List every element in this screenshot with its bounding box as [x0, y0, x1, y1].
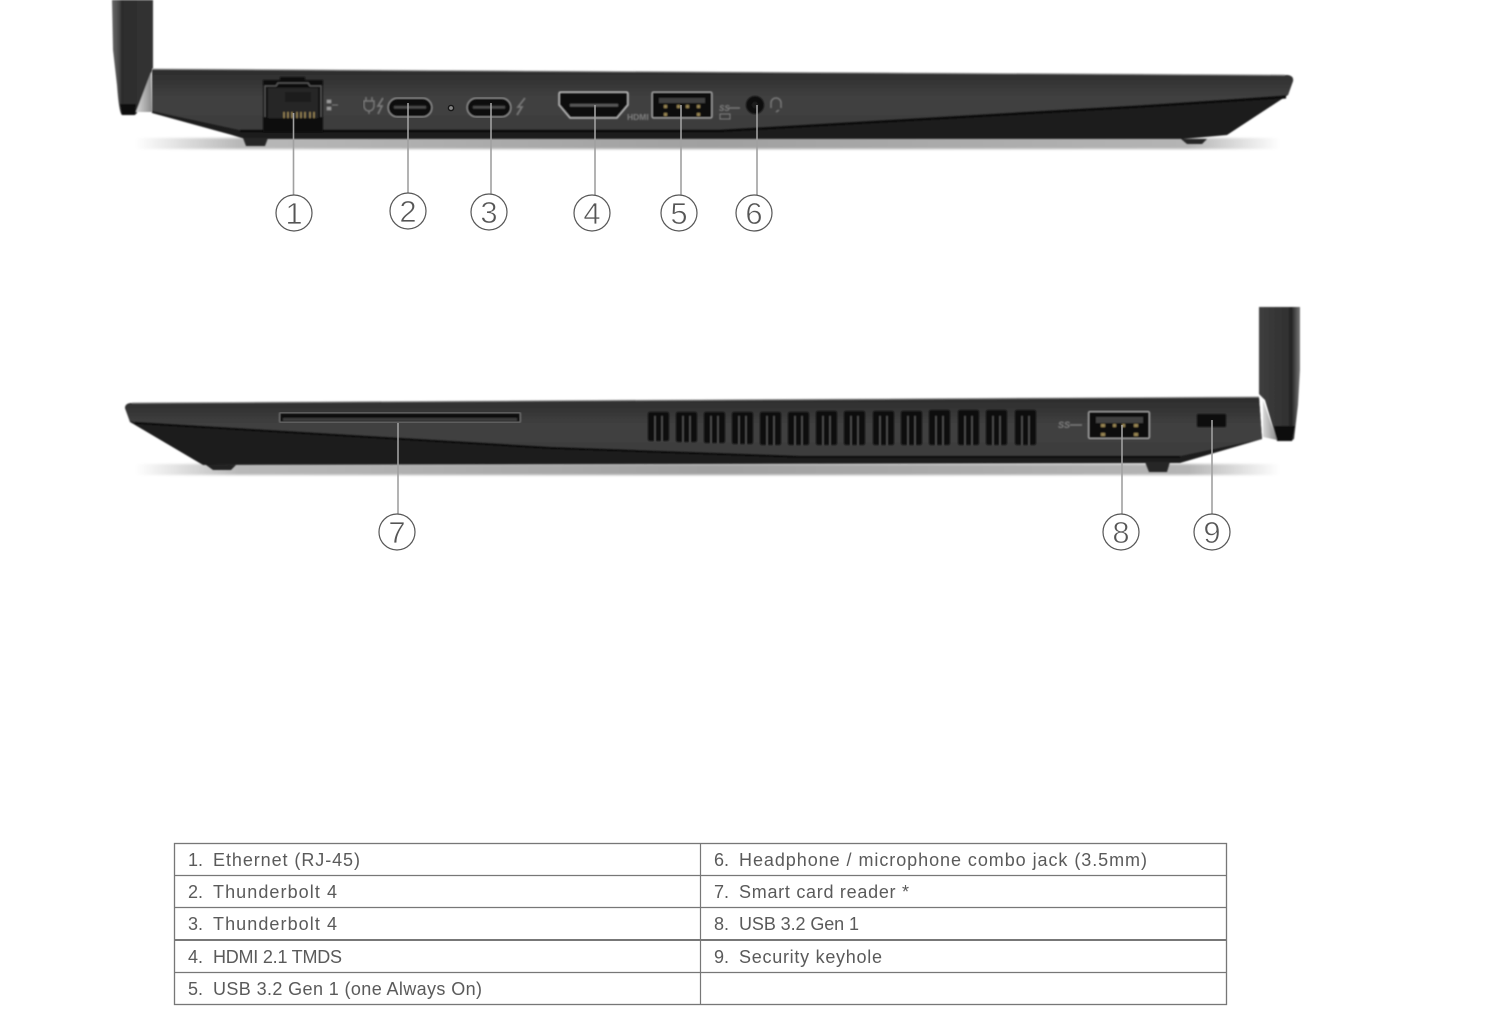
callout 3	[471, 103, 507, 230]
callout 9	[1194, 420, 1230, 550]
row 4 right: 9.	[714, 947, 729, 967]
row 1 left: 1.	[188, 850, 203, 870]
port: USB 3.2 Gen 1 always on: SS	[719, 104, 730, 113]
ventilation grille	[648, 410, 1036, 445]
row 1 right: 6.	[714, 850, 729, 870]
laptop: left side view	[112, 0, 1293, 149]
icon: power plug and lightning	[364, 97, 383, 114]
callout 5	[661, 105, 697, 231]
row 1 left: Ethernet (RJ-45)	[213, 850, 360, 870]
indicator light	[448, 105, 454, 111]
row 5 left: 5.	[188, 979, 203, 999]
lid, right view	[1259, 307, 1300, 441]
callout 1: 1	[285, 196, 303, 231]
port: ethernet RJ-45	[263, 77, 338, 132]
callout 6	[736, 105, 772, 231]
callout 8: 8	[1112, 515, 1130, 550]
row 3 right: USB 3.2 Gen 1	[739, 914, 859, 934]
row 2 right: 7.	[714, 882, 729, 902]
port: USB 3.2 Gen 1	[1088, 412, 1150, 438]
port: smart card reader slot	[280, 412, 520, 422]
port: Thunderbolt 4 right	[467, 98, 525, 117]
callout 1	[276, 113, 312, 231]
port: HDMI: HDMI	[627, 112, 649, 122]
row 4 right: Security keyhole	[739, 947, 882, 967]
callout 7: 7	[388, 515, 406, 550]
icon: SuperSpeed USB: SS	[1058, 420, 1070, 430]
row 5 left: USB 3.2 Gen 1 (one Always On)	[213, 979, 482, 999]
icon: SuperSpeed USB	[1058, 420, 1082, 430]
row 2 left: 2.	[188, 882, 203, 902]
port: USB 3.2 Gen 1 always on	[652, 92, 740, 119]
row 2 right: Smart card reader *	[739, 882, 909, 902]
row 1 right: Headphone / microphone combo jack (3.5mm)	[739, 850, 1147, 870]
laptop: right side view	[125, 307, 1300, 475]
callout 2: 2	[399, 194, 417, 229]
row 3 left: 3.	[188, 914, 203, 934]
callout 8	[1103, 425, 1139, 550]
callout 4: 4	[583, 196, 601, 231]
shadow under right view	[135, 464, 1280, 475]
legend table	[174, 843, 1227, 1004]
callout 3: 3	[480, 195, 498, 230]
shadow under left view	[135, 138, 1280, 149]
callout 2	[390, 103, 426, 229]
row 4 left: 4.	[188, 947, 203, 967]
row 4 left: HDMI 2.1 TMDS	[213, 947, 342, 967]
port: Thunderbolt 4 left	[388, 98, 432, 117]
row 3 right: 8.	[714, 914, 729, 934]
port: HDMI	[559, 92, 649, 122]
laptop body, right view	[125, 397, 1262, 472]
callout 4	[574, 105, 610, 231]
lid, left view	[112, 0, 153, 115]
callout 5: 5	[670, 196, 688, 231]
callout 6: 6	[745, 196, 763, 231]
callout 9: 9	[1203, 515, 1221, 550]
port: security keyhole	[1197, 414, 1226, 427]
row 3 left: Thunderbolt 4	[213, 914, 337, 934]
callout 7	[379, 423, 415, 550]
row 2 left: Thunderbolt 4	[213, 882, 337, 902]
laptop body, left view	[152, 69, 1293, 146]
port: headphone jack	[746, 96, 781, 114]
